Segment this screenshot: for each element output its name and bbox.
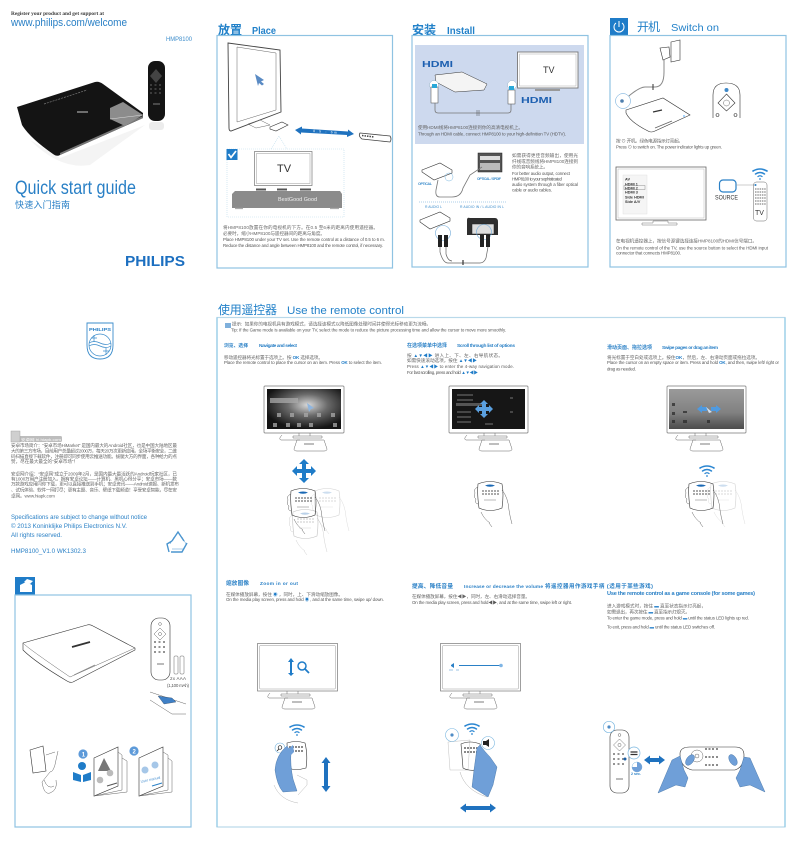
tv source menu: Side HDMI xyxy=(625,196,644,200)
tv: options list screen xyxy=(449,386,528,451)
model number: HMP8100 xyxy=(166,37,193,43)
register line: Register your product and get support at xyxy=(11,11,104,17)
arrow: vertical swipe xyxy=(322,757,330,792)
hdmi logo left: HDMI xyxy=(422,60,453,69)
tv xyxy=(518,52,578,91)
tv remote xyxy=(754,182,767,221)
tv: swipe screen xyxy=(667,386,746,451)
heading: place: Place xyxy=(252,25,276,37)
section: navigate: Navigate and select xyxy=(259,343,297,349)
text: audio: For better audio output, connect xyxy=(512,171,571,176)
text: audio: 纤线或音频线将HMP8100连接到 xyxy=(512,158,578,165)
chinese intro text: 安卓市场简介：“安卓市场HiMarket” 是国内最大的Android社区，也是中国大陆地区最 xyxy=(11,442,177,449)
text: audio: 如需获得更佳音频输出，使用光 xyxy=(512,152,578,159)
optical connection diagram: OPTICAL / SPDIF xyxy=(477,177,501,181)
media box with power port xyxy=(616,94,690,132)
section: zoom: Zoom in or out xyxy=(260,581,298,587)
audio divider labels: R AUDIO IN / L AUDIO IN L xyxy=(460,205,504,209)
philips shield xyxy=(87,323,113,359)
optical connection diagram: OPTICAL xyxy=(418,182,433,186)
tv source menu: AV xyxy=(625,178,630,182)
philips wordmark: PHILIPS xyxy=(125,253,185,270)
chinese subtitle: 快速入门指南 xyxy=(15,199,70,210)
text: hdmi: 使用HDMI线将HMP8100连接到你的高清电视机上。 xyxy=(418,124,523,131)
tv remote: TV xyxy=(755,210,764,217)
section: zoom xyxy=(226,579,384,603)
section: volume: 将遥控器用作游戏手柄 (适用于某些游戏) xyxy=(545,582,653,590)
section: volume: 在媒体播放屏幕，按住◀▶，同时，左、右滑动选择音量。 xyxy=(412,593,530,600)
chinese intro text: 有1000万用户注册加入。拥有安卓论坛——计算机、黑机心得分享；安卓市场——数 xyxy=(11,476,177,482)
heading: use the remote control: Use the remote control xyxy=(287,305,404,317)
heading: use the remote control xyxy=(218,302,404,317)
text: source: On the remote control of the TV, use the source button to select the HDMI input xyxy=(616,246,769,250)
remote top with power key xyxy=(713,83,740,118)
step badge 2 xyxy=(129,746,139,756)
tv: zoom xyxy=(258,644,338,709)
analog connection diagram xyxy=(420,212,498,265)
chinese intro text: 赞，尽在最大最全的“安卓市场”！ xyxy=(11,458,78,465)
tv: android home screen xyxy=(264,386,344,451)
hand with remote: swipe xyxy=(685,482,745,527)
tv stand: BestGood Good xyxy=(278,197,317,203)
section: scroll: 如需快速滚动选项，按住 ▲▼◀▶ xyxy=(407,357,477,364)
watermark badge xyxy=(11,431,62,442)
audio divider labels: R AUDIO L xyxy=(425,205,442,209)
text: audio: audio system through a fiber optical xyxy=(512,182,578,187)
text: audio: cable or audio cables. xyxy=(512,188,552,192)
heading: install: 安装 xyxy=(412,22,436,37)
text: power: Press ⊙ to switch on. The power indicator lights up green. xyxy=(616,144,722,150)
tip: Tip: If the Game mode is available on your TV, select the mode to reduce the picture processing time and allow the cursor to move more smoothly. xyxy=(231,328,506,332)
remote pointing xyxy=(359,133,391,142)
legal notice xyxy=(11,514,147,555)
section: scroll: Scroll through list of options xyxy=(457,343,515,349)
blue hands holding remote xyxy=(658,753,765,793)
text: power xyxy=(616,138,722,150)
tip: 提示: 如果你的电视机具有游戏模式，请选择该模式以降低图像处理时间并使得光标移动更为流畅。 xyxy=(232,320,431,328)
source button xyxy=(715,180,755,202)
text: place: Place HMP8100 under your TV set. Use the remote control at a distance of 0.5 to 6 m. xyxy=(223,237,385,242)
callout: correct placement xyxy=(226,136,344,217)
section: scroll: 按 ▲▼◀▶ 进入上、下、左、右导航状态。 xyxy=(407,352,503,359)
icon: recycle xyxy=(167,532,187,552)
hand with remote: zoom xyxy=(274,742,307,803)
tv: TV xyxy=(543,65,555,75)
hand with remote: navigate xyxy=(287,488,349,555)
callout: 2 sec timer xyxy=(631,762,642,776)
text: source: connector that connects HMP8100. xyxy=(616,250,681,256)
safety booklet xyxy=(94,747,127,796)
heading: place: 放置 xyxy=(218,22,242,37)
text: place: Reduce the distance and angle between HMP8100 and the remote control, if necessary. xyxy=(223,243,383,248)
text: hdmi: Through an HDMI cable, connect HMP8100 to your high-definition TV (HDTV). xyxy=(418,132,566,136)
battery label: 2x AAA xyxy=(170,676,186,681)
section: game console: To enter the game mode, press and hold ▬ until the status LED lights up red. xyxy=(607,616,749,620)
distance arrow xyxy=(295,126,354,137)
tv: volume xyxy=(440,644,520,709)
chinese intro text: 、试玩体验、软件一网打尽；更有主题、音乐、壁纸下载频道！享受安卓智能，尽在安 xyxy=(11,486,177,494)
battery insertion xyxy=(150,692,186,714)
section: zoom: On the media play screen, press and hold ◉ , and at the same time, swipe up/ down. xyxy=(226,596,384,603)
power adapter xyxy=(30,746,58,793)
watermark badge: 安卓网 hi.hiapk.com xyxy=(21,437,61,442)
audio divider labels xyxy=(419,202,506,209)
arrow: double head xyxy=(644,756,665,764)
section: navigate: 浏览、选择 xyxy=(224,342,248,349)
section: navigate: 移动遥控器将光标置于选项上。按 OK 选择选项。 xyxy=(224,354,323,361)
text: hdmi xyxy=(418,124,566,136)
text: place: 将HMP8100放置在你的电视机的下方。在0.5 至6米的距离内使用遥控器。 xyxy=(223,224,378,231)
legal notice: © 2013 Koninklijke Philips Electronics N.V. xyxy=(11,522,127,530)
optical connection diagram xyxy=(418,153,502,197)
section: game console: Use the remote control as a game console (for some games) xyxy=(607,591,755,597)
product photo: remote xyxy=(148,61,165,130)
heading: switch on: 开机 xyxy=(637,20,660,34)
panel: box contents xyxy=(15,595,191,827)
icon: power square xyxy=(610,18,628,36)
hand with remote: volume xyxy=(446,728,497,797)
batteries xyxy=(174,656,184,674)
product photo: media box xyxy=(17,82,145,166)
callout: led indicator xyxy=(603,721,615,733)
website url: www.philips.com/welcome xyxy=(10,17,127,29)
section: swipe xyxy=(607,344,780,372)
section: swipe: Swipe pages or drag an item xyxy=(662,345,718,351)
section: navigate: Place the remote control to place the cursor on an item. Press OK to select the item. xyxy=(224,360,382,365)
arrow: horizontal swipe xyxy=(460,804,496,812)
outline of media box xyxy=(23,625,135,682)
tv source menu: Side A/V xyxy=(625,200,641,204)
text: power: 按 ⊙ 开机。绿色电源指示灯亮起。 xyxy=(616,138,683,144)
section: scroll: For fast scrolling, press and hold ▲▼◀▶ xyxy=(407,370,479,375)
legal notice: Specifications are subject to change without notice xyxy=(11,514,147,521)
remote outline xyxy=(151,618,170,680)
heading: switch on: Switch on xyxy=(671,22,719,34)
step badge 1 xyxy=(78,749,88,759)
section: swipe: drag as needed. xyxy=(607,366,636,372)
text: audio: HMP8100 to your sophisticated xyxy=(512,176,563,182)
icon: check xyxy=(226,149,238,160)
hdmi logo right: HDMI xyxy=(521,96,552,105)
battery label xyxy=(167,676,190,688)
text: place xyxy=(223,224,385,248)
section: game console xyxy=(607,591,755,630)
callout: 2 sec timer: 2 sec. xyxy=(631,772,641,776)
source button: SOURCE xyxy=(715,196,738,202)
legal notice: HMP8100_V1.0 WK1302.3 xyxy=(11,548,86,555)
text: place: 必要时，缩小HMP8100与遥控器间的距离与角度。 xyxy=(223,230,325,237)
panel: install xyxy=(412,36,588,267)
hdmi section background xyxy=(415,45,584,144)
section: navigate xyxy=(224,342,382,365)
power adapter and wire xyxy=(626,40,680,99)
section: game console: 如需退出，再次按住 ▬ 直至指示灯熄灭。 xyxy=(607,608,690,616)
legal notice: All rights reserved. xyxy=(11,532,62,539)
tv source menu xyxy=(616,167,706,225)
icon: signal volume xyxy=(465,724,479,735)
icon: four way arrow xyxy=(292,459,316,483)
icon: open box xyxy=(15,577,35,595)
philips shield: PHILIPS xyxy=(89,327,112,333)
heading: install: Install xyxy=(447,25,475,37)
panel: switch on xyxy=(610,36,786,267)
chinese intro text: 万款游戏应用同你下载，更可以直接推送到手机；安卓资讯——Android速报、新机发布 xyxy=(11,480,179,488)
cursor xyxy=(255,74,264,86)
chinese intro text: 码扫描直接下载软件，注册即可同步使用云推送功能。拔腿大方的界面，各种给力的点 xyxy=(11,453,177,460)
panel: place xyxy=(217,36,392,268)
tip xyxy=(225,320,506,332)
text: audio: 你的音响系统上。 xyxy=(512,164,548,170)
section: volume: 提高、降低音量 xyxy=(412,582,453,590)
tv source menu: HDMI 3 xyxy=(625,190,638,194)
section: zoom: 在媒体播放屏幕，按住 ◉ ，同时，上、下滑动缩放图像。 xyxy=(226,591,343,598)
section: scroll xyxy=(407,342,515,375)
heading: install xyxy=(412,22,475,37)
console mode remote xyxy=(680,747,744,770)
text: source: 在电视机遥控器上，按信号源键选择连接HMP8100的HDMI信号端口。 xyxy=(616,238,757,244)
tv source menu: HDMI 2 xyxy=(625,186,638,190)
section: zoom: 缩放图像 xyxy=(226,579,249,587)
distance arrow: 0.5 - 6m xyxy=(313,129,337,135)
section: volume: Increase or decrease the volume xyxy=(464,584,543,590)
section: swipe: Place the cursor on an empty space or item. Press and hold OK, and then, swipe left/ right or xyxy=(607,360,780,365)
tv line drawing xyxy=(228,43,281,131)
section: volume: On the media play screen, press and hold◀▶, and at the same time, swipe left or right. xyxy=(412,600,572,605)
user manual booklet: User manual xyxy=(140,776,161,784)
section: swipe: 滑动页面、拖拉选项 xyxy=(607,344,652,351)
user manual booklet xyxy=(139,747,172,796)
chinese intro text: 卓网。www.hiapk.com xyxy=(11,492,55,500)
chinese intro text xyxy=(11,442,179,500)
step badge 1: 1 xyxy=(82,752,86,758)
section: scroll: Press ▲▼◀▶ to enter the 4-way navigation mode. xyxy=(407,364,514,369)
icon: signal swipe xyxy=(700,466,714,477)
media box xyxy=(435,72,487,92)
icon: read manual xyxy=(73,762,91,782)
section: scroll: 在选项菜单中选择 xyxy=(407,342,447,349)
heading: use the remote control: 使用遥控器 xyxy=(218,302,277,317)
text: audio xyxy=(512,152,578,192)
section: game console: To exit, press and hold ▬ until the status LED switches off. xyxy=(607,624,715,630)
callout: game button xyxy=(628,747,640,759)
section: volume xyxy=(412,582,653,605)
heading: place xyxy=(218,22,276,37)
chinese intro text: 大的第三方市场，目前用户总量超过2000万，每天20万次更新应用。全场平衡安全，二维 xyxy=(11,448,177,454)
cover: register url xyxy=(10,11,127,29)
section: swipe: 将光标置于空白处或选项上。按住OK，然后，左、右滑动页面或拖拉选项。 xyxy=(607,354,760,361)
game remote xyxy=(610,730,629,793)
icon: signal xyxy=(753,169,767,180)
text: source xyxy=(616,238,769,256)
hand with remote: scroll xyxy=(474,482,512,527)
panel: remote control xyxy=(217,318,785,827)
icon: signal zoom xyxy=(290,725,304,736)
chinese intro text: 安卓网介绍：“安卓网”成立于2009年2月，是国内最大最活跃的Android玩家社区，已 xyxy=(11,470,177,478)
tv source menu: HDMI 1 xyxy=(625,182,638,186)
step badge 2: 2 xyxy=(132,749,136,755)
section: game console: 进入游戏模式时，按住 ▬ 直至状态指示灯亮起， xyxy=(607,602,706,610)
hdmi cable xyxy=(430,80,516,116)
battery label: (1,100 mAh) xyxy=(167,683,190,688)
heading: switch on xyxy=(637,20,719,34)
title: Quick start guide xyxy=(15,177,136,199)
tv: TV xyxy=(277,163,292,175)
media box small xyxy=(270,122,288,131)
